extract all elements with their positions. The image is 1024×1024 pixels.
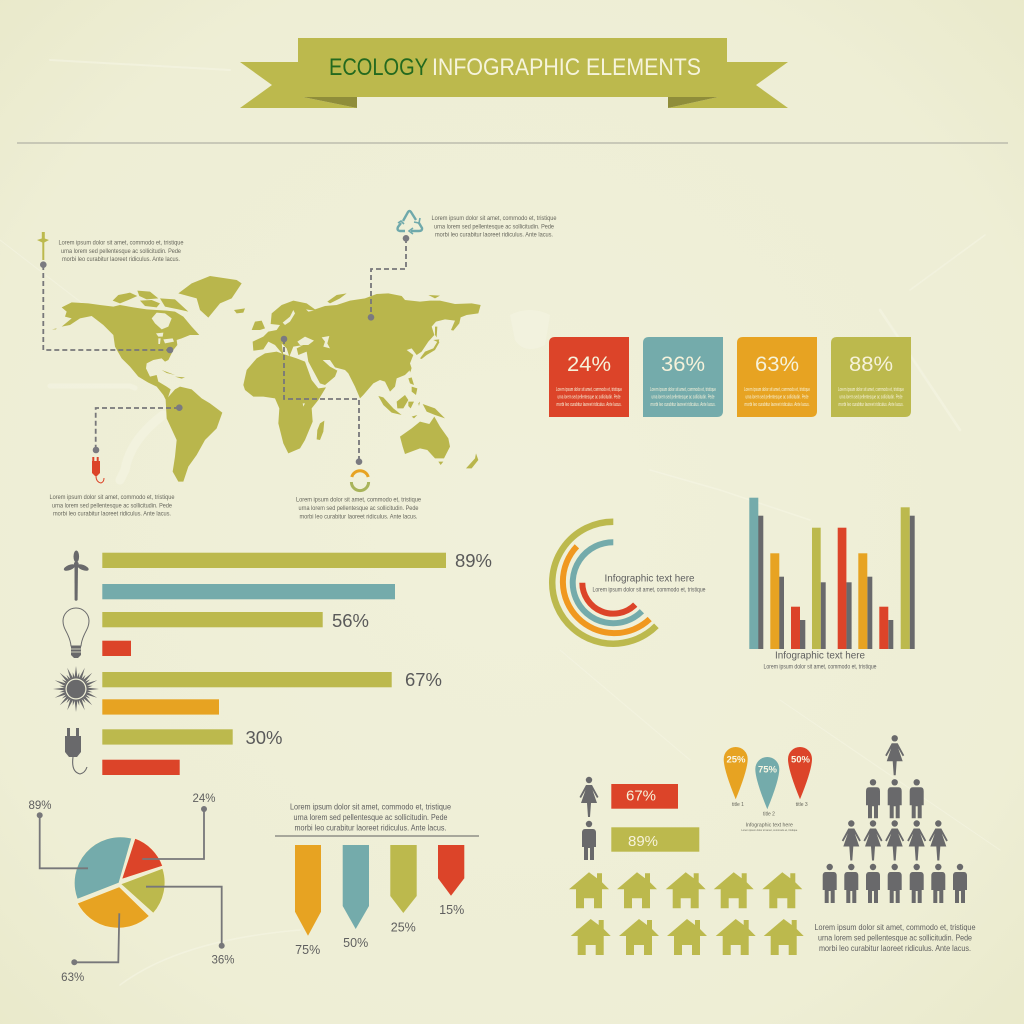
percentage cards: [549, 337, 911, 417]
icon: recycle arrows: [398, 211, 422, 234]
note text: urna lorem sed pellentesque ac sollicitudin. Pede: [294, 812, 448, 822]
continents: Americas: [52, 276, 245, 482]
arc chart caption: [592, 574, 706, 594]
card: 24%: 24%: [567, 353, 611, 376]
icon: sun: [53, 666, 99, 712]
concentric arc chart: [552, 522, 706, 644]
pin values: 25%: [726, 754, 746, 766]
card: 36%: 36%: [661, 353, 705, 376]
bar values: [626, 788, 658, 850]
note text: morbi leo curabitur laoreet ridiculus. Ante lacus.: [294, 822, 446, 832]
grouped bar chart: [749, 498, 915, 670]
title text: INFOGRAPHIC ELEMENTS: [432, 54, 701, 81]
card: 24%: urna lorem sed pellentesque ac sollicitudin. Pede: [558, 394, 621, 400]
card: 36%: Lorem ipsum dolor sit amet, commodo et, tristique: [650, 387, 716, 393]
pie labels: 63%: [61, 972, 84, 984]
icon: light bulb: [63, 608, 89, 658]
people pyramid: [823, 735, 967, 903]
text: map note top right: Lorem ipsum dolor sit amet, commodo et, tristique: [432, 215, 557, 222]
text: map note top right: urna lorem sed pellentesque ac sollicitudin. Pede: [434, 223, 554, 230]
pin captions: Infographic text here: [746, 822, 793, 828]
text: map note bottom left: [50, 494, 175, 518]
pie chart with leader lines: [28, 793, 235, 984]
arrow labels: 50%: [343, 936, 368, 950]
horizontal bars with energy icons: [53, 550, 492, 775]
arrow labels: 15%: [439, 903, 464, 917]
text: map note top left: morbi leo curabitur laoreet ridiculus. Ante lacus.: [62, 256, 180, 263]
pin captions: title 2: [763, 812, 775, 818]
icon: wind turbine: [63, 550, 90, 601]
dashed connectors: [43, 238, 406, 461]
arrow labels: 75%: [295, 943, 320, 957]
arc chart caption: Lorem ipsum dolor sit amet, commodo et, tristique: [592, 586, 706, 594]
bar values: 89%: [628, 833, 658, 850]
pin captions: Lorem ipsum dolor sit amet, commodo et, tristique: [741, 828, 798, 832]
connector dots: [40, 235, 409, 465]
icon: circular arrows: [351, 471, 369, 491]
bar labels: 30%: [246, 727, 282, 748]
pin captions: [732, 802, 808, 832]
card: 88%: urna lorem sed pellentesque ac sollicitudin. Pede: [840, 394, 903, 400]
text: pyramid note: morbi leo curabitur laoreet ridiculus. Ante lacus.: [819, 943, 971, 953]
card: 63%: 63%: [755, 353, 799, 376]
icon: red plug: [92, 457, 104, 483]
icon: wind turbine small: [37, 232, 49, 260]
bar chart caption: [764, 650, 877, 670]
card: 24%: morbi leo curabitur laoreet ridiculus. Ante lacus.: [556, 402, 622, 408]
icon: power plug: [65, 728, 87, 774]
arrow bars chart: [275, 802, 479, 957]
card: 88%: [831, 337, 911, 417]
bar labels: 56%: [332, 610, 369, 631]
text: pyramid note: urna lorem sed pellentesque ac sollicitudin. Pede: [818, 932, 972, 942]
pie labels: 24%: [192, 793, 216, 805]
card: 36%: morbi leo curabitur laoreet ridiculus. Ante lacus.: [650, 402, 716, 408]
arc chart caption: Infographic text here: [604, 574, 695, 584]
text: map note top right: [432, 215, 557, 238]
icon: woman: [580, 777, 598, 817]
bar chart caption: Infographic text here: [775, 650, 865, 662]
bar values: 67%: [626, 788, 656, 804]
card: 63%: urna lorem sed pellentesque ac sollicitudin. Pede: [746, 394, 809, 400]
text: map note top left: Lorem ipsum dolor sit amet, commodo et, tristique: [58, 240, 184, 247]
bar labels: 67%: [405, 669, 442, 690]
text: map note top left: [58, 240, 184, 263]
pie labels: 36%: [211, 954, 235, 966]
pin captions: title 1: [732, 802, 744, 808]
card: 36%: [643, 337, 723, 417]
text: map note bottom left: morbi leo curabitur laoreet ridiculus. Ante lacus.: [53, 511, 171, 518]
leader dots: [37, 806, 225, 965]
gender bars: [580, 777, 699, 860]
continents: Africa and Eurasia: [243, 293, 481, 468]
text: map note bottom middle: [296, 496, 421, 520]
bar labels: 89%: [455, 550, 492, 571]
card: 63%: [737, 337, 817, 417]
card: 63%: Lorem ipsum dolor sit amet, commodo et, tristique: [744, 387, 810, 393]
pie labels: [28, 793, 235, 984]
leader lines: [40, 809, 222, 962]
bar chart caption: Lorem ipsum dolor sit amet, commodo et, tristique: [764, 664, 877, 670]
arrow labels: [295, 903, 464, 957]
card: 88%: 88%: [849, 353, 893, 376]
note text: [290, 802, 451, 832]
pie labels: 89%: [28, 800, 52, 812]
text: map note bottom middle: urna lorem sed pellentesque ac sollicitudin. Pede: [298, 505, 419, 512]
card: 63%: morbi leo curabitur laoreet ridiculus. Ante lacus.: [744, 402, 810, 408]
text: pyramid note: [814, 922, 976, 953]
pin values: 50%: [791, 754, 811, 766]
card: 88%: Lorem ipsum dolor sit amet, commodo et, tristique: [838, 387, 904, 393]
title ribbon: [240, 38, 788, 108]
houses: [569, 872, 804, 955]
pin captions: title 3: [796, 802, 808, 808]
bar labels: [246, 550, 492, 748]
world map with callouts: [37, 211, 557, 520]
pin values: 75%: [758, 764, 778, 776]
card: 36%: urna lorem sed pellentesque ac sollicitudin. Pede: [652, 394, 715, 400]
text: map note bottom middle: Lorem ipsum dolor sit amet, commodo et, tristique: [296, 496, 421, 504]
title text: ECOLOGY: [329, 54, 428, 81]
card: 24%: [549, 337, 629, 417]
text: map note top right: morbi leo curabitur laoreet ridiculus. Ante lacus.: [435, 232, 553, 238]
text: map note bottom left: urna lorem sed pellentesque ac sollicitudin. Pede: [52, 502, 172, 509]
icon: man: [582, 821, 596, 860]
text: map note bottom left: Lorem ipsum dolor sit amet, commodo et, tristique: [50, 494, 175, 501]
pin values: [726, 754, 811, 776]
text: pyramid note: Lorem ipsum dolor sit amet, commodo et, tristique: [814, 922, 976, 932]
text: map note bottom middle: morbi leo curabitur laoreet ridiculus. Ante lacus.: [300, 513, 418, 520]
map pins: [724, 747, 812, 832]
note text: Lorem ipsum dolor sit amet, commodo et, tristique: [290, 802, 451, 812]
card: 24%: Lorem ipsum dolor sit amet, commodo et, tristique: [556, 387, 622, 393]
arrow labels: 25%: [391, 921, 416, 935]
card: 88%: morbi leo curabitur laoreet ridiculus. Ante lacus.: [838, 402, 904, 408]
text: map note top left: urna lorem sed pellentesque ac sollicitudin. Pede: [61, 248, 181, 255]
